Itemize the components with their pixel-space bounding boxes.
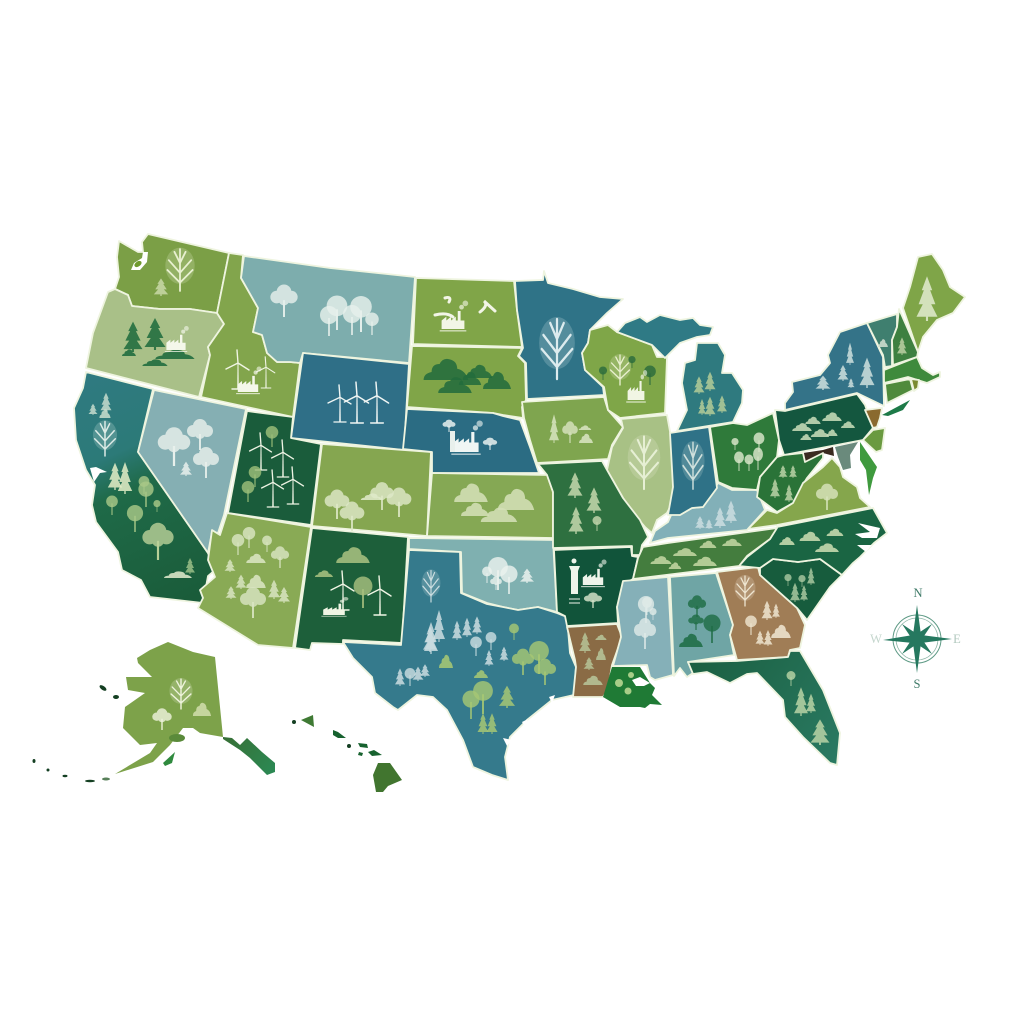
panel: Maryland [835, 442, 858, 470]
panel: Alaska panhandle [223, 737, 275, 775]
panel: North Dakota [413, 278, 522, 347]
icons: delta trees [615, 672, 634, 694]
icons: wind turbines and factory [226, 350, 275, 394]
panel: Minnesota [515, 271, 623, 399]
icon: pale tree [628, 435, 660, 489]
panel: Michigan lower peninsula [677, 343, 743, 431]
Alaska [32, 642, 275, 782]
icons: pale trees [579, 632, 607, 685]
icons: factory with smoke [435, 298, 495, 331]
panel: Massachusetts [884, 357, 940, 383]
icons: tree and pine [154, 248, 195, 296]
icons: varied forest trees [395, 569, 556, 734]
panel: Michigan upper peninsula [617, 315, 713, 358]
icons: round trees [158, 419, 219, 478]
icon: branching tree [539, 317, 575, 379]
panel: Colorado [312, 444, 431, 536]
panel: Florida [688, 651, 840, 765]
panel: Ohio [710, 413, 779, 490]
panel: Nebraska [403, 409, 539, 473]
panel: Nevada [138, 390, 246, 553]
icons: trees [325, 482, 411, 531]
panel: Arizona [198, 513, 311, 648]
icons: round trees [270, 284, 379, 336]
icons: trees [784, 567, 815, 602]
panel: South Dakota [407, 346, 526, 418]
compass letter W: W [870, 632, 882, 646]
panel: Alabama [670, 573, 734, 677]
compass letter N: N [913, 586, 923, 600]
panel: Washington [115, 234, 229, 313]
map of the contiguous United States [74, 234, 965, 780]
panel: Arkansas [554, 547, 638, 626]
panel: Missouri [538, 461, 648, 555]
icons: pale trees [786, 671, 830, 745]
icons: trees and pines [224, 527, 290, 618]
icons: tree [816, 484, 838, 510]
panel: Maine [903, 254, 965, 352]
panel: Kodiak island [163, 752, 175, 766]
panel: Oregon [86, 289, 224, 397]
icons: factory and trees [442, 420, 497, 454]
panel: New York [785, 323, 884, 410]
icons: pines [816, 343, 874, 390]
icons: bushes [650, 539, 742, 569]
Aleutian islands [32, 684, 185, 782]
icons: pines [694, 372, 727, 416]
icons: tower, factory and plants [569, 558, 607, 608]
icons: dark green trees [679, 595, 721, 647]
panel: New Jersey north [865, 408, 882, 428]
icons: dark green hills [424, 359, 511, 393]
panel: Iowa [522, 397, 623, 463]
panel: New Hampshire [892, 309, 918, 365]
panel: Long Island [882, 400, 910, 416]
icon: branching tree [681, 441, 705, 489]
icons: round trees [482, 557, 534, 594]
icon: tree [878, 339, 888, 347]
panel: Delaware and Maryland shore [860, 442, 877, 495]
Hawaii [292, 715, 402, 792]
icon: tree [897, 337, 907, 355]
icon: pine [916, 276, 938, 321]
panel: Rhode Island [911, 379, 919, 391]
panel: Idaho [201, 253, 300, 417]
icons: pines [568, 472, 602, 534]
panel: Tennessee [633, 528, 777, 579]
panel: Wyoming [291, 353, 409, 450]
panel: Louisiana delta [603, 667, 662, 708]
panel: Mississippi [613, 577, 673, 680]
panel: Illinois [607, 415, 675, 533]
panel: New Jersey south [863, 428, 885, 452]
panel: Vermont [867, 314, 897, 367]
panel: Texas [343, 550, 576, 780]
panel: Montana [241, 256, 415, 363]
icons: bushes [779, 529, 843, 552]
panel: Virginia [748, 458, 870, 529]
panel: South Carolina [760, 559, 842, 620]
panel: West Virginia [757, 453, 823, 512]
panel: Utah [228, 411, 321, 525]
panel: Georgia [717, 567, 805, 660]
icons: pale trees [734, 575, 791, 646]
panel: Louisiana [567, 624, 622, 697]
icons: trees [634, 596, 657, 649]
icons: bushes [792, 412, 855, 440]
panel: New Mexico [295, 528, 408, 650]
icons: turbines and trees [242, 426, 303, 507]
icons: Alaska trees [152, 678, 211, 730]
icons: round trees [731, 432, 764, 471]
panel: Wisconsin [582, 325, 667, 418]
panel: Oklahoma [409, 538, 557, 612]
panel: California [74, 372, 215, 603]
panel: Indiana [668, 427, 717, 515]
panel: Pennsylvania [775, 394, 873, 455]
panel: Kentucky [650, 483, 765, 543]
icons: three wind turbines [328, 382, 389, 423]
icons: plants [549, 414, 593, 443]
icons: trees [88, 393, 195, 578]
panel: Kansas [427, 473, 553, 538]
icons: trees, hills and turbines [315, 547, 391, 616]
icons: pines [770, 465, 797, 502]
compass letter S: S [914, 677, 921, 691]
icons: dark forest and factory [122, 318, 195, 366]
icons: pines [695, 501, 737, 529]
panel: North Carolina [739, 508, 887, 575]
compass letter E: E [953, 632, 961, 646]
panel: Connecticut [885, 379, 913, 403]
compass rose [870, 586, 961, 691]
panel: Maryland west [803, 447, 834, 462]
icons: trees and factory [599, 354, 656, 402]
icons: hills [454, 484, 534, 522]
